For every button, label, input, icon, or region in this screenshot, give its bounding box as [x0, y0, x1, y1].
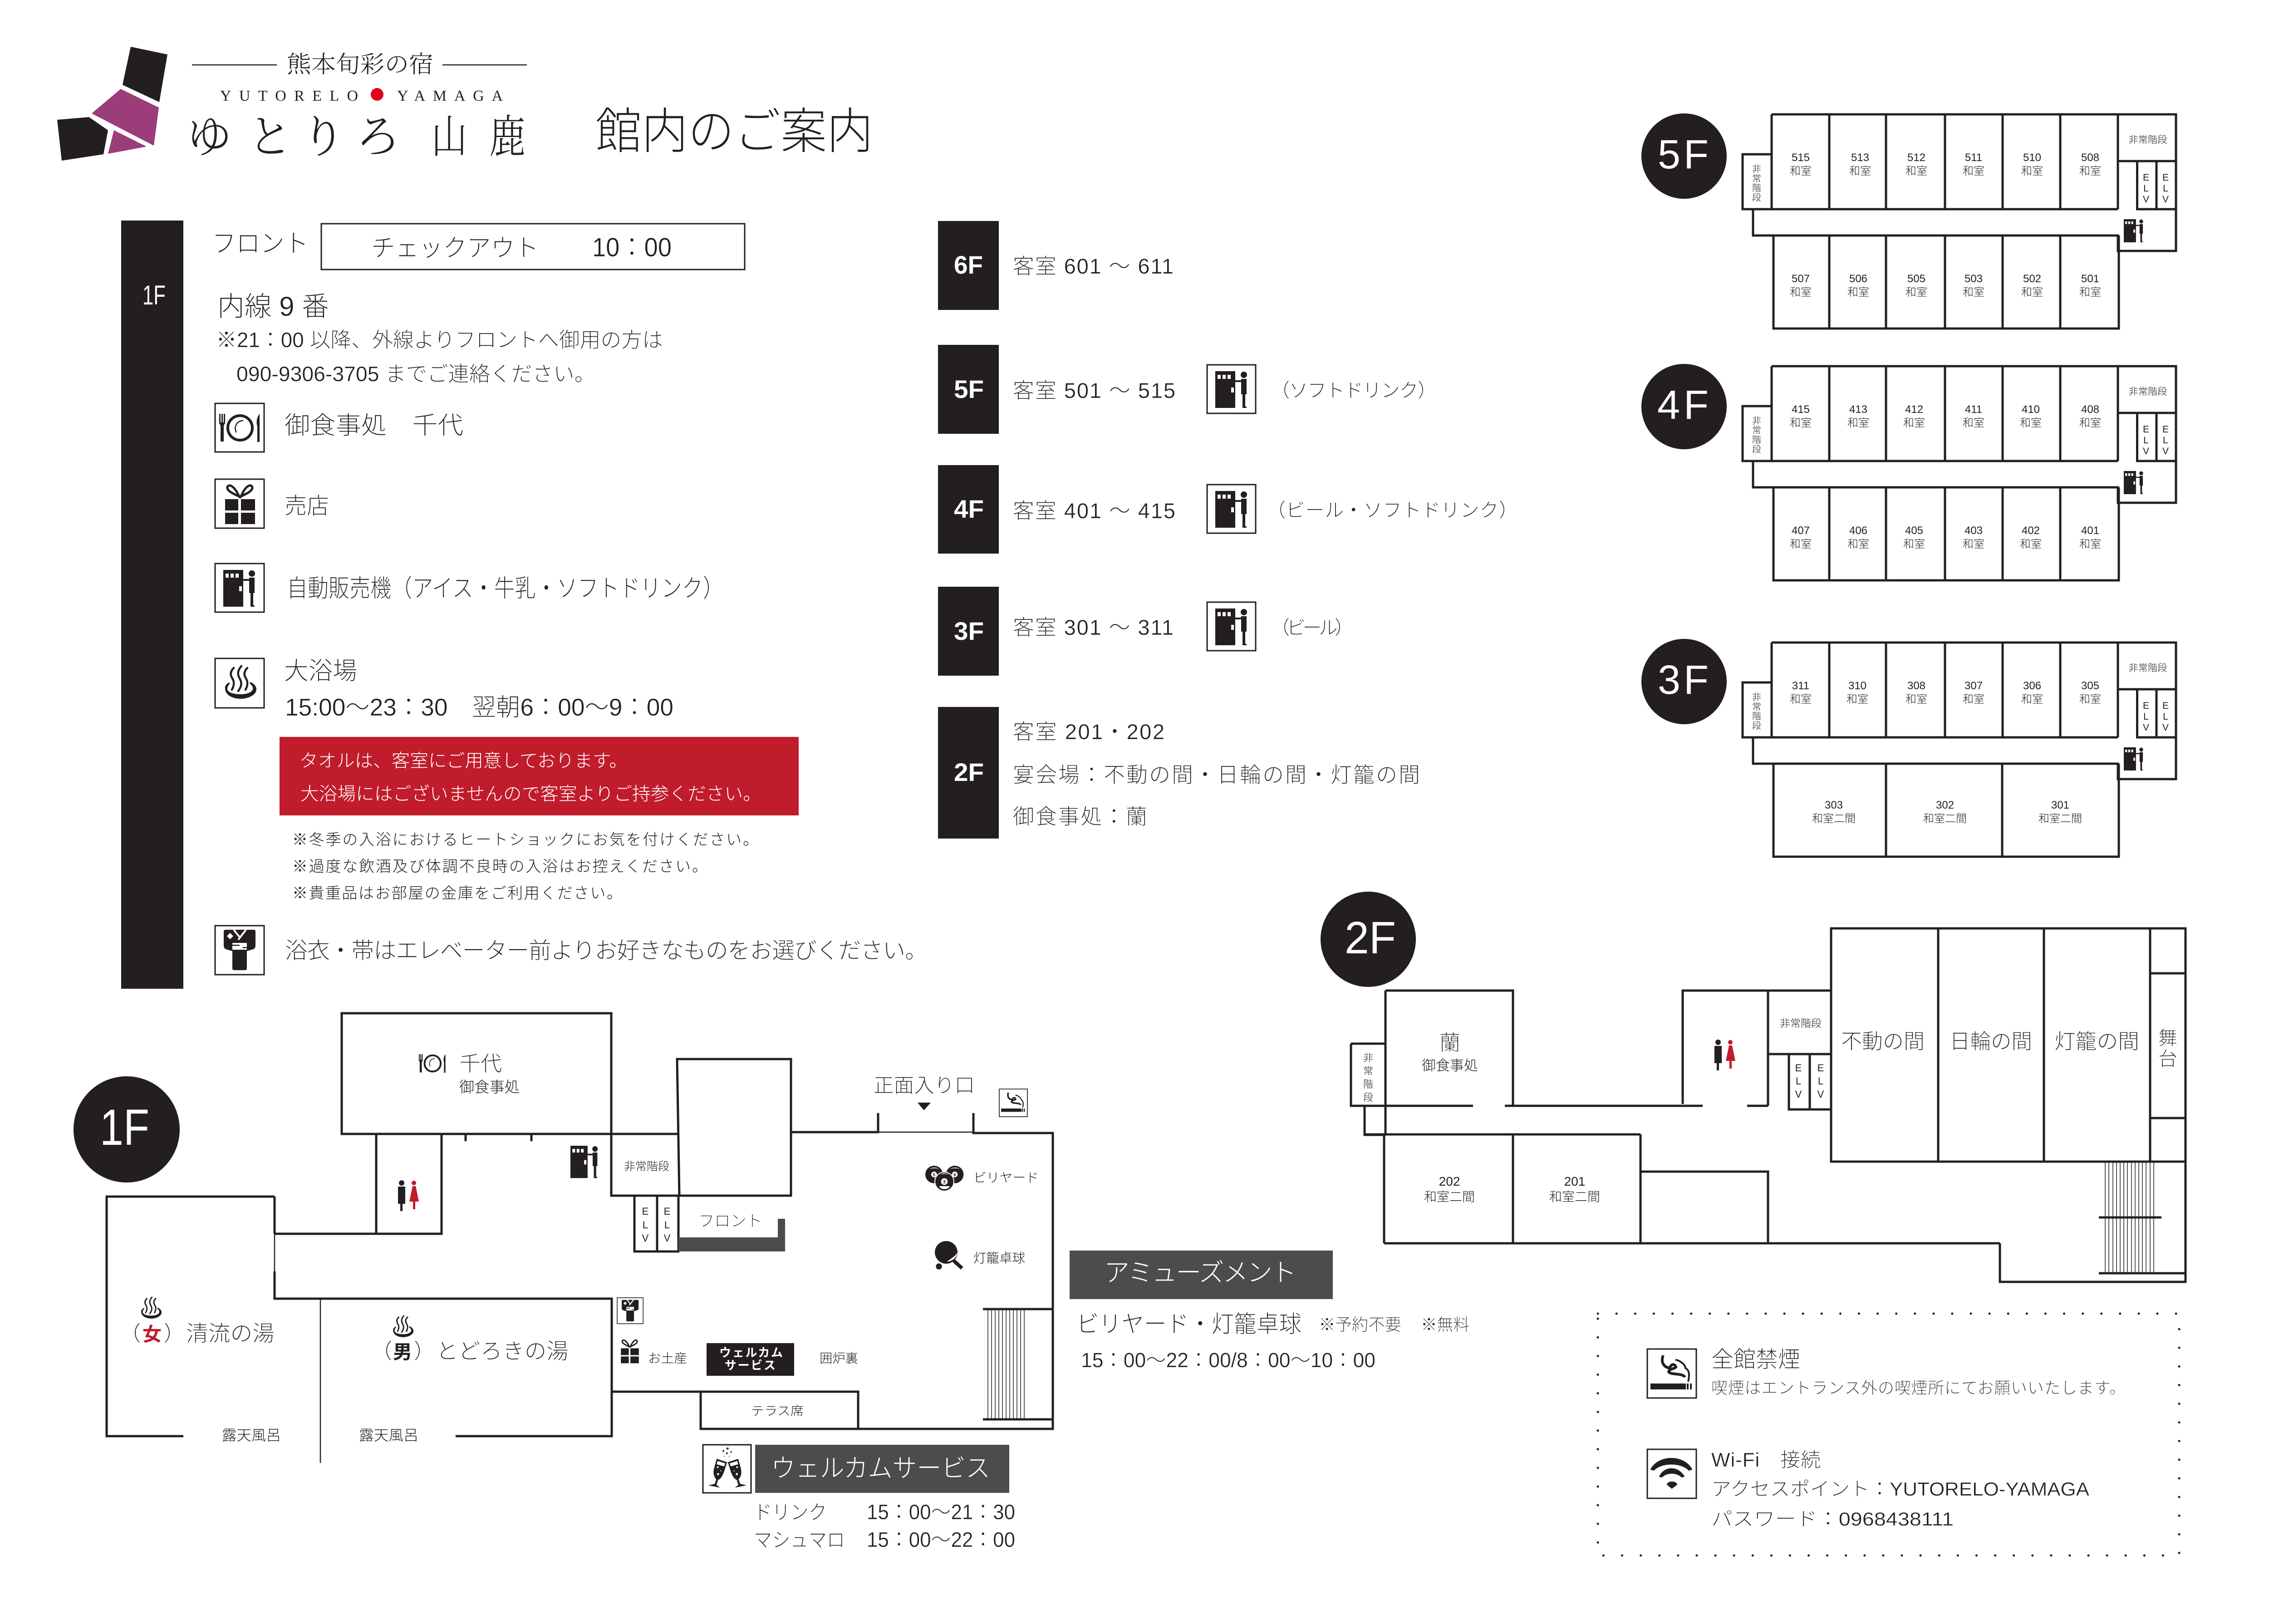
- bath heading and hours: 15:00～23：30 翌朝6：00～9：00: [285, 694, 673, 721]
- floor plan: 5F: 和室: [2021, 162, 2043, 178]
- floor plan: 1F: サービス: [725, 1356, 776, 1373]
- 4F row: （ビール・ソフトドリンク）: [1267, 495, 1518, 523]
- icon: gift: [215, 479, 264, 528]
- floor plan: 3F: 和室二間: [1923, 810, 1967, 825]
- floor plan: 2F: 舞: [2158, 1023, 2177, 1050]
- panel: 1F directory: [121, 221, 928, 989]
- panel: amusement: ※無料: [1421, 1311, 1469, 1335]
- floor plan: 2F: 階: [1363, 1076, 1373, 1091]
- floor plan: 1F: ビリヤード: [973, 1168, 1039, 1186]
- 5F row: 客室 501 ～ 515: [1013, 378, 1175, 402]
- panel: floor directory: [938, 221, 1518, 839]
- floor plan: 5F: 512: [1907, 152, 1925, 164]
- 4F row: 客室 401 ～ 415: [1013, 499, 1175, 523]
- 5F row: [938, 345, 1437, 434]
- floor plan: 4F: 和室: [2020, 414, 2042, 430]
- no smoking text: 喫煙はエントランス外の喫煙所にてお願いいたします。: [1711, 1375, 2126, 1398]
- floor plan: 5F: 和室: [2021, 283, 2043, 299]
- floor plan: 2F: V: [1817, 1089, 1824, 1100]
- floor plan: 1F: V: [664, 1232, 671, 1244]
- floor plan: 1F: （: [120, 1317, 141, 1347]
- floor plan: 2F: 非: [1363, 1050, 1373, 1065]
- floor plan: 1F: 女: [142, 1319, 162, 1347]
- floor plan: 5F: 和室: [1790, 283, 1812, 299]
- floor plan: 1F: 千代: [459, 1047, 502, 1077]
- logo: YUTORELO: [220, 88, 358, 104]
- front desk heading: フロント: [212, 223, 309, 260]
- floor plan: 4F: 415: [1792, 403, 1810, 416]
- floor plan: 2F: V: [1795, 1089, 1802, 1100]
- checkout box: チェックアウト: [371, 228, 539, 264]
- panel: welcome service: ドリンク: [754, 1496, 827, 1525]
- floor plan: 5F: 和室: [1906, 162, 1927, 178]
- 1F side bar: [121, 221, 183, 989]
- logo: [57, 47, 527, 162]
- floor plan: 3F: 和室二間: [1812, 810, 1856, 825]
- floor plan: 2F: 蘭: [1439, 1026, 1460, 1056]
- floor plan: 4F: 和室: [1963, 535, 1984, 551]
- floor plan: 3F: 和室: [2021, 690, 2043, 706]
- floor plan: 1F: ウェルカム: [719, 1344, 783, 1360]
- 6F row: 6F: [954, 250, 983, 279]
- floor plan: 1F: E: [664, 1206, 670, 1217]
- panel: welcome service: 15：00～21：30: [867, 1500, 1015, 1524]
- floor plan: 3F: 311: [1792, 680, 1809, 692]
- panel: amusement: アミューズメント: [1104, 1252, 1297, 1289]
- panel: amusement: [1070, 1251, 1469, 1372]
- floor plan: 1F: 1F: [100, 1099, 149, 1156]
- logo: 熊本旬彩の宿: [287, 52, 433, 78]
- 3F row: [938, 587, 1354, 676]
- panel: amusement: ※予約不要: [1319, 1311, 1401, 1335]
- floor plan: 4F: 407: [1792, 525, 1810, 537]
- yukata text: 浴衣・帯はエレベーター前よりお好きなものをお選びください。: [285, 938, 928, 963]
- floor plan: 5F: 和室: [1906, 283, 1927, 299]
- 2F row: 宴会場：不動の間・日輪の間・灯籠の間: [1013, 763, 1420, 787]
- floor plan: 5F: 501: [2081, 273, 2099, 285]
- 3F row: （ビール）: [1271, 613, 1354, 640]
- bath notes: ※貴重品はお部屋の金庫をご利用ください。: [292, 885, 622, 902]
- icon: hot spring: [215, 658, 264, 708]
- floor plan: 1F: お土産: [648, 1349, 687, 1367]
- floor plan: 5F: 505: [1907, 273, 1925, 285]
- 4F row: 4F: [954, 495, 984, 523]
- floor plan: 1F: 清流の湯: [186, 1315, 275, 1347]
- 3F row: 客室 301 ～ 311: [1013, 615, 1174, 639]
- floor plan: 2F: E: [1817, 1062, 1824, 1074]
- floor plan: 2F: [1321, 892, 2186, 1282]
- floor plan: 2F: 御食事処: [1422, 1054, 1478, 1074]
- no smoking text: 全館禁煙: [1711, 1341, 1800, 1374]
- floor plan: 5F: 和室: [1963, 162, 1984, 178]
- floor plan: 4F: 和室: [1790, 535, 1812, 551]
- wifi text: Wi-Fi 接続: [1711, 1449, 1821, 1471]
- floor plan: 1F: 灯籠卓球: [973, 1248, 1025, 1266]
- icon: vending machine: [215, 564, 264, 612]
- floor plan: 1F: L: [664, 1219, 670, 1231]
- wifi text: [1711, 1449, 2089, 1530]
- floor plan: 5F: 507: [1792, 273, 1810, 285]
- floor plan: 5F: 和室: [1790, 162, 1812, 178]
- 2F row: 客室 201・202: [1013, 720, 1164, 744]
- floor plan: 1F: [74, 1013, 1053, 1463]
- floor plan: 5F: 515: [1792, 152, 1810, 164]
- floor plan: 3F: 307: [1965, 680, 1983, 692]
- floor plan: 4F: 410: [2022, 403, 2040, 416]
- extension number: 090-9306-3705 までご連絡ください。: [236, 362, 595, 386]
- panel: welcome service: マシュマロ: [754, 1524, 845, 1553]
- floor plan: 1F: 囲炉裏: [820, 1349, 858, 1367]
- bath heading and hours: 大浴場: [284, 651, 357, 687]
- bath notes: [292, 831, 758, 902]
- floor plan: 5F: 5F: [1658, 132, 1709, 177]
- bath notes: ※冬季の入浴におけるヒートショックにお気を付けください。: [292, 831, 758, 849]
- floor plan: 4F: 和室: [1847, 535, 1869, 551]
- floor plan: 4F: 401: [2081, 525, 2099, 537]
- logo: 山鹿: [431, 112, 526, 162]
- bath heading and hours: [284, 651, 673, 721]
- floor plan: 5F: [1641, 113, 2176, 329]
- floor plan: 2F: 常: [1363, 1063, 1373, 1078]
- floor plan: 1F: テラス席: [751, 1401, 804, 1419]
- floor plan: 4F: 和室: [1847, 414, 1869, 430]
- floor plan: 5F: 503: [1965, 273, 1983, 285]
- floor plan: 2F: 2F: [1345, 913, 1396, 963]
- floor plan: 4F: 405: [1905, 525, 1923, 537]
- red towel notice: [280, 737, 799, 815]
- floor plan: 4F: 411: [1965, 403, 1982, 416]
- floor plan: 4F: 4F: [1657, 383, 1709, 428]
- floor plan: 3F: 308: [1907, 680, 1925, 692]
- floor plan: 5F: 506: [1849, 273, 1867, 285]
- 2F row: 2F: [954, 758, 984, 786]
- 2F row: 御食事処：蘭: [1013, 805, 1147, 829]
- floor plan: 3F: 和室: [1963, 690, 1984, 706]
- floor plan: 2F: 不動の間: [1841, 1025, 1925, 1055]
- floor plan: 2F: 灯籠の間: [2054, 1025, 2139, 1055]
- floor plan: 4F: 413: [1849, 403, 1867, 416]
- bath notes: ※過度な飲酒及び体調不良時の入浴はお控えください。: [292, 858, 707, 875]
- floor plan: 5F: 和室: [2079, 162, 2101, 178]
- floor plan: 5F: 510: [2023, 152, 2041, 164]
- floor plan: 3F: 310: [1848, 680, 1866, 692]
- floor plan: 5F: 502: [2023, 273, 2041, 285]
- floor plan: 2F: 202: [1439, 1174, 1460, 1188]
- floor plan: 1F: （: [371, 1335, 392, 1365]
- floor plan: 4F: 和室: [2020, 535, 2042, 551]
- floor plan: 4F: 和室: [1903, 414, 1925, 430]
- floor plan: 3F: 和室二間: [2038, 810, 2082, 825]
- floor plan: 3F: 302: [1936, 799, 1954, 811]
- floor plan: 3F: [1641, 639, 2176, 857]
- wifi text: パスワード：0968438111: [1711, 1508, 1954, 1530]
- floor plan: 1F: 露天風呂: [359, 1424, 418, 1445]
- floor plan: 1F: 5: [933, 1173, 935, 1177]
- floor plan: 5F: 513: [1851, 152, 1869, 164]
- checkout box: 10：00: [592, 233, 672, 262]
- floor plan: 3F: 303: [1825, 799, 1843, 811]
- 3F row: 3F: [954, 617, 984, 645]
- panel: welcome service: [703, 1445, 1015, 1553]
- floor plan: 1F: L: [643, 1219, 648, 1231]
- floor plan: 1F: V: [642, 1232, 649, 1244]
- panel: amusement: ビリヤード・灯籠卓球: [1076, 1305, 1301, 1339]
- floor plan: 3F: 3F: [1658, 657, 1709, 703]
- title: 館内のご案内: [595, 92, 873, 163]
- floor plan: 3F: 和室: [1847, 690, 1868, 706]
- floor plan: 4F: 和室: [1903, 535, 1925, 551]
- panel: amusement: 15：00～22：00/8：00～10：00: [1081, 1349, 1375, 1372]
- floor plan: 4F: 412: [1905, 403, 1923, 416]
- 5F row: 5F: [954, 375, 984, 403]
- floor plan: 5F: 511: [1965, 152, 1982, 164]
- extension number: ※21：00 以降、外線よりフロントへ御用の方は: [216, 328, 663, 352]
- icon: yukata: [215, 926, 264, 975]
- logo: ゆとりろ: [187, 112, 401, 162]
- floor plan: 1F: 男: [393, 1337, 412, 1364]
- floor plan: 1F: E: [642, 1206, 648, 1217]
- floor plan: 4F: 和室: [1790, 414, 1812, 430]
- floor plan: 2F: E: [1795, 1062, 1802, 1074]
- floor plan: 2F: L: [1796, 1075, 1801, 1087]
- floor plan: 4F: 403: [1965, 525, 1983, 537]
- floor plan: 1F: 正面入り口: [874, 1069, 975, 1098]
- wifi text: アクセスポイント：YUTORELO-YAMAGA: [1711, 1478, 2089, 1500]
- floor plan: 1F: フロント: [698, 1208, 762, 1231]
- floor plan: 3F: 301: [2051, 799, 2069, 811]
- floor plan: 3F: 306: [2023, 680, 2041, 692]
- floor plan: 2F: 台: [2158, 1044, 2177, 1071]
- floor plan: 3F: 305: [2081, 680, 2099, 692]
- floor plan: 1F: 御食事処: [459, 1075, 520, 1097]
- floor plan: 3F: 和室: [1790, 690, 1812, 706]
- floor plan: 5F: 508: [2081, 152, 2099, 164]
- floor plan: 1F: ）: [164, 1317, 185, 1347]
- floor plan: 4F: 和室: [1963, 414, 1984, 430]
- extension number: [216, 291, 663, 386]
- floor plan: 4F: 和室: [2079, 535, 2101, 551]
- floor plan: 3F: 和室: [2079, 690, 2101, 706]
- floor plan: 4F: 408: [2081, 403, 2099, 416]
- extension number: 内線 9 番: [217, 291, 329, 322]
- checkout box: [321, 224, 745, 270]
- 1F side bar: 1F: [142, 280, 166, 310]
- 4F row: [938, 465, 1518, 554]
- floor plan: 2F: 非常階段: [1780, 1015, 1822, 1030]
- 6F row: [938, 221, 1174, 310]
- floor plan: 1F: 8: [953, 1173, 956, 1177]
- icon: wifi: [1647, 1449, 1696, 1498]
- panel: welcome service: 15：00～22：00: [867, 1528, 1015, 1551]
- floor plan: 4F: [1641, 364, 2176, 580]
- floor plan: 5F: 和室: [1847, 283, 1869, 299]
- floor plan: 1F: 非常階段: [624, 1158, 669, 1174]
- floor plan: 1F: 3: [943, 1179, 946, 1185]
- floor plan: 2F: 和室二間: [1424, 1187, 1475, 1205]
- floor plan: 5F: 和室: [2079, 283, 2101, 299]
- floor plan: 1F: ）: [414, 1335, 435, 1365]
- floor plan: 4F: 和室: [2079, 414, 2101, 430]
- panel: smoking and wifi: [1598, 1314, 2179, 1555]
- 5F row: （ソフトドリンク）: [1271, 375, 1437, 403]
- 2F row: [938, 707, 1420, 839]
- logo: YAMAGA: [397, 88, 503, 104]
- no smoking text: [1711, 1341, 2126, 1398]
- floor plan: 4F: 406: [1849, 525, 1867, 537]
- floor plan: 5F: 和室: [1849, 162, 1871, 178]
- floor plan: 2F: 段: [1363, 1089, 1373, 1104]
- floor plan: 1F: 露天風呂: [222, 1424, 281, 1445]
- floor plan: 2F: 201: [1564, 1174, 1585, 1188]
- panel: welcome service: ウェルカムサービス: [771, 1448, 990, 1485]
- vending text: 自動販売機（アイス・牛乳・ソフトドリンク）: [287, 568, 724, 604]
- red towel notice: 大浴場にはございませんので客室よりご持参ください。: [300, 784, 761, 804]
- floor plan: 2F: L: [1818, 1075, 1823, 1087]
- floor plan: 5F: 和室: [1963, 283, 1984, 299]
- floor plan: 3F: 和室: [1906, 690, 1927, 706]
- shop text: 売店: [285, 488, 329, 520]
- floor plan: 4F: 402: [2022, 525, 2040, 537]
- restaurant text: 御食事処 千代: [285, 405, 463, 441]
- red towel notice: タオルは、客室にご用意しております。: [300, 751, 628, 771]
- icon: smoking: [1647, 1349, 1696, 1398]
- floor plan: 2F: 和室二間: [1549, 1187, 1600, 1205]
- icon: meal: [215, 403, 264, 452]
- floor plan: 1F: とどろきの湯: [436, 1333, 569, 1365]
- 6F row: 客室 601 ～ 611: [1013, 254, 1174, 278]
- floor plan: 2F: 日輪の間: [1950, 1025, 2032, 1055]
